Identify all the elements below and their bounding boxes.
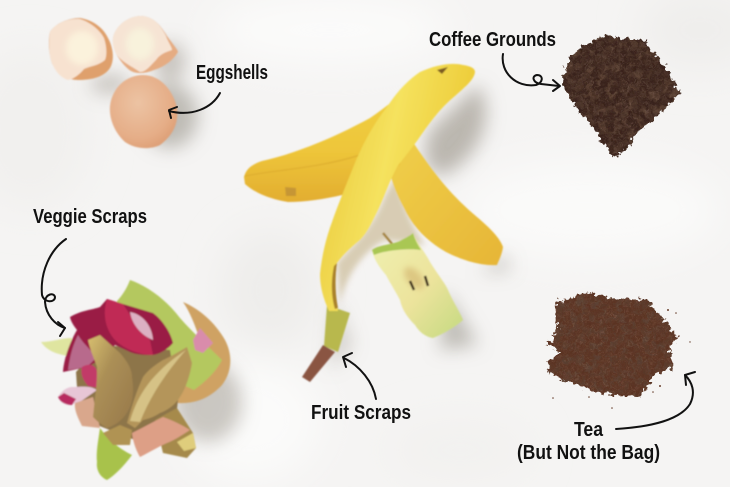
panel: tea <box>547 292 691 409</box>
base shadow inside the pile <box>76 345 178 440</box>
icon: avocado skin <box>117 280 222 390</box>
icon: left eggshell <box>49 18 113 80</box>
icon: right eggshell <box>113 16 178 73</box>
panel: veggie scraps <box>41 280 230 480</box>
label: veggie scraps: Veggie Scraps <box>33 206 147 228</box>
shadows under objects <box>90 42 510 442</box>
arrow: fruit scraps <box>343 353 376 399</box>
label: coffee grounds: Coffee Grounds <box>429 29 556 51</box>
label: tea: (But Not the Bag) <box>517 442 660 464</box>
icon: potato skins <box>75 335 196 458</box>
label: fruit scraps: Fruit Scraps <box>311 402 411 424</box>
icon: red onion skins <box>58 299 173 405</box>
panel: coffee grounds <box>562 35 680 157</box>
icon: main banana strip <box>320 64 475 311</box>
arrow: veggie scraps <box>42 239 66 336</box>
icon: banana stem <box>302 305 350 382</box>
icon: pink patch on avocado <box>193 328 213 353</box>
arrow: tea <box>616 372 695 429</box>
icon: apple core <box>372 233 463 338</box>
tea pile <box>547 292 677 397</box>
tea specks <box>552 309 691 409</box>
label: tea <box>517 419 660 464</box>
label: eggshells: Eggshells <box>196 62 268 84</box>
icon: small left green peel <box>41 338 72 356</box>
icon: bottom green peel <box>97 428 132 480</box>
icon: right banana strip <box>390 130 503 265</box>
label: tea: Tea <box>574 419 604 441</box>
shadow under the banana fold <box>337 175 425 305</box>
coffee pile <box>562 35 680 157</box>
panel: banana peel and apple core <box>244 64 503 382</box>
arrow: eggshells <box>169 93 220 118</box>
panel: eggshells <box>49 16 178 148</box>
icon: potato peel curl <box>150 302 230 403</box>
arrow: coffee grounds <box>503 54 560 91</box>
icon: left banana strip <box>244 85 415 202</box>
icon: whole egg <box>110 75 177 148</box>
